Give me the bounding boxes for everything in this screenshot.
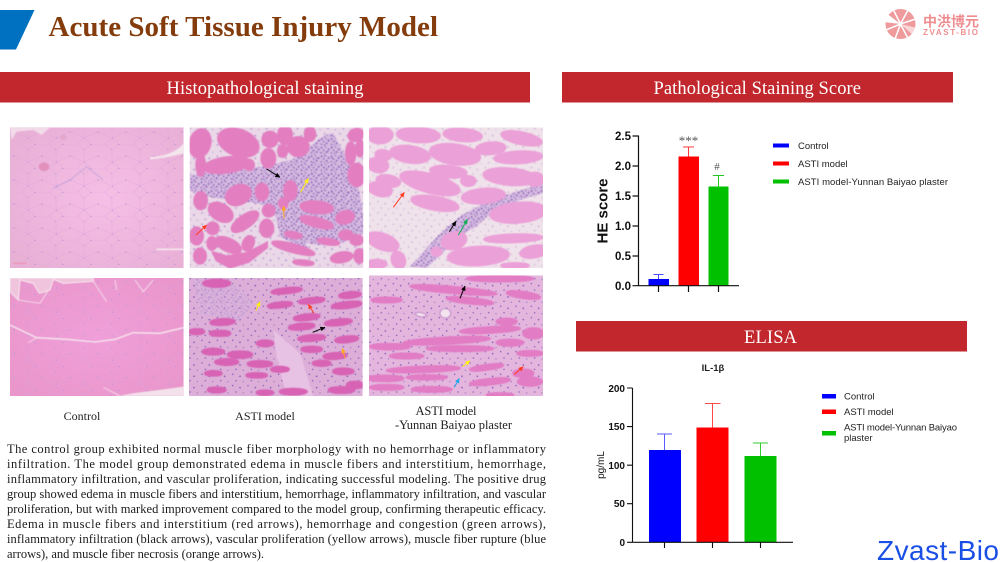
legend: HE score chart [773, 141, 948, 188]
bar: ASTI model IL-1β [696, 404, 728, 542]
axis tick labels: 50 [614, 499, 625, 510]
axis tick labels: 100 [608, 461, 625, 472]
body text: findings description: Edema in muscle fibers and interstitium (red arrows), hemorrhage and congestion (green arrows), [7, 517, 546, 531]
axis tick labels: 0.0 [615, 281, 631, 293]
caption: Control: Control [64, 409, 101, 423]
axis tick labels [608, 384, 625, 549]
micrograph: ASTI model-Yunnan Baiyao plaster, row 1, with arrows [364, 127, 549, 270]
axis tick labels: 1.0 [615, 221, 631, 233]
title: Acute Soft Tissue Injury Model [48, 11, 438, 43]
axis tick labels [615, 131, 632, 293]
micrograph: ASTI model-Yunnan Baiyao plaster, row 2, with arrows [367, 275, 543, 397]
section bar: Histopathological staining [0, 72, 530, 102]
chart title: IL-1β [702, 363, 725, 374]
axis tick labels: 2.5 [615, 131, 632, 143]
legend: IL-1β chart [822, 392, 957, 444]
body text: findings description: group showed edema in muscle fibers and interstitium, hemorrhage, inflammatory infiltration, and vascular [7, 487, 547, 501]
body text: findings description: inflammatory infiltration, and vascular proliferation, indicating successful modeling. The positive drug [7, 472, 547, 486]
section bar: Pathological Staining Score [562, 72, 953, 102]
significance marks: *** [679, 133, 698, 148]
micrograph: Control, row 2 [10, 278, 184, 396]
caption: ASTI model -Yunnan Baiyao plaster: ASTI model [416, 404, 477, 418]
section bar: ELISA: ELISA [744, 328, 798, 348]
logo: Zvast-Bio wheel and wordmark: ZVAST-BIO [923, 28, 978, 37]
significance marks [679, 133, 720, 173]
bar: Yunnan Baiyao plaster HE score [708, 176, 728, 286]
bar chart: HE score [594, 131, 739, 293]
axis tick labels: 1.5 [615, 191, 632, 203]
body text: findings description: infiltration. The model group demonstrated edema in muscle fibers and interstitium, hemorrhage, [7, 457, 546, 471]
logo: Zvast-Bio wheel and wordmark: 中洪博元 [923, 14, 979, 30]
body text: findings description [7, 442, 547, 561]
logo: Zvast-Bio wheel and wordmark [884, 9, 979, 39]
body text: findings description: proliferation, but with marked improvement compared to the model group, confirming therapeutic efficacy. [7, 502, 546, 516]
caption: ASTI model: ASTI model [235, 409, 295, 423]
micrograph: ASTI model, row 2, with arrows [189, 278, 363, 396]
y-axis title: pg/mL [596, 451, 607, 479]
axis tick labels: 200 [608, 384, 625, 395]
legend: IL-1β chart: Control [844, 392, 875, 402]
body text: findings description: arrows), and muscle fiber necrosis (orange arrows). [7, 547, 264, 561]
header accent: blue parallelogram [0, 10, 34, 50]
legend: IL-1β chart: ASTI model-Yunnan Baiyao [844, 422, 957, 434]
y-axis title: HE score [594, 178, 612, 244]
bar: Yunnan Baiyao plaster IL-1β [744, 443, 776, 542]
axes and ticks [627, 388, 793, 548]
axis tick labels: 2.0 [615, 161, 631, 173]
bar: Control IL-1β [649, 434, 681, 542]
axis tick labels: 0.5 [615, 251, 632, 263]
axis tick labels: 0 [619, 538, 625, 549]
axes and ticks [632, 136, 739, 292]
section bar: ELISA [576, 321, 967, 352]
section bar: Pathological Staining Score: Pathological Staining Score [654, 79, 861, 99]
legend: IL-1β chart: plaster [844, 433, 873, 444]
bar chart: IL-1β ELISA [596, 363, 793, 549]
legend: HE score chart: Control [798, 141, 829, 152]
bar: Control HE score [648, 274, 669, 286]
body text: findings description: The control group exhibited normal muscle fiber morphology with no hemorrhage or inflammatory [7, 442, 547, 456]
caption: ASTI model -Yunnan Baiyao plaster [395, 404, 513, 432]
caption: ASTI model -Yunnan Baiyao plaster: -Yunnan Baiyao plaster [395, 418, 513, 432]
section bar: Histopathological staining: Histopathological staining [166, 79, 364, 99]
bar: ASTI model HE score [678, 147, 699, 286]
legend: HE score chart: ASTI model-Yunnan Baiyao plaster [798, 177, 948, 188]
axis tick labels: 150 [608, 422, 625, 433]
significance marks: # [714, 161, 720, 173]
legend: HE score chart: ASTI model [798, 159, 848, 170]
legend: IL-1β chart: ASTI model [844, 407, 894, 418]
micrograph: Control, row 1 [10, 127, 184, 268]
body text: findings description: inflammatory infiltration (black arrows), vascular proliferation (yellow arrows), muscle fiber rupture (blue [7, 532, 546, 546]
micrograph: ASTI model, row 1, with arrows [187, 124, 365, 268]
